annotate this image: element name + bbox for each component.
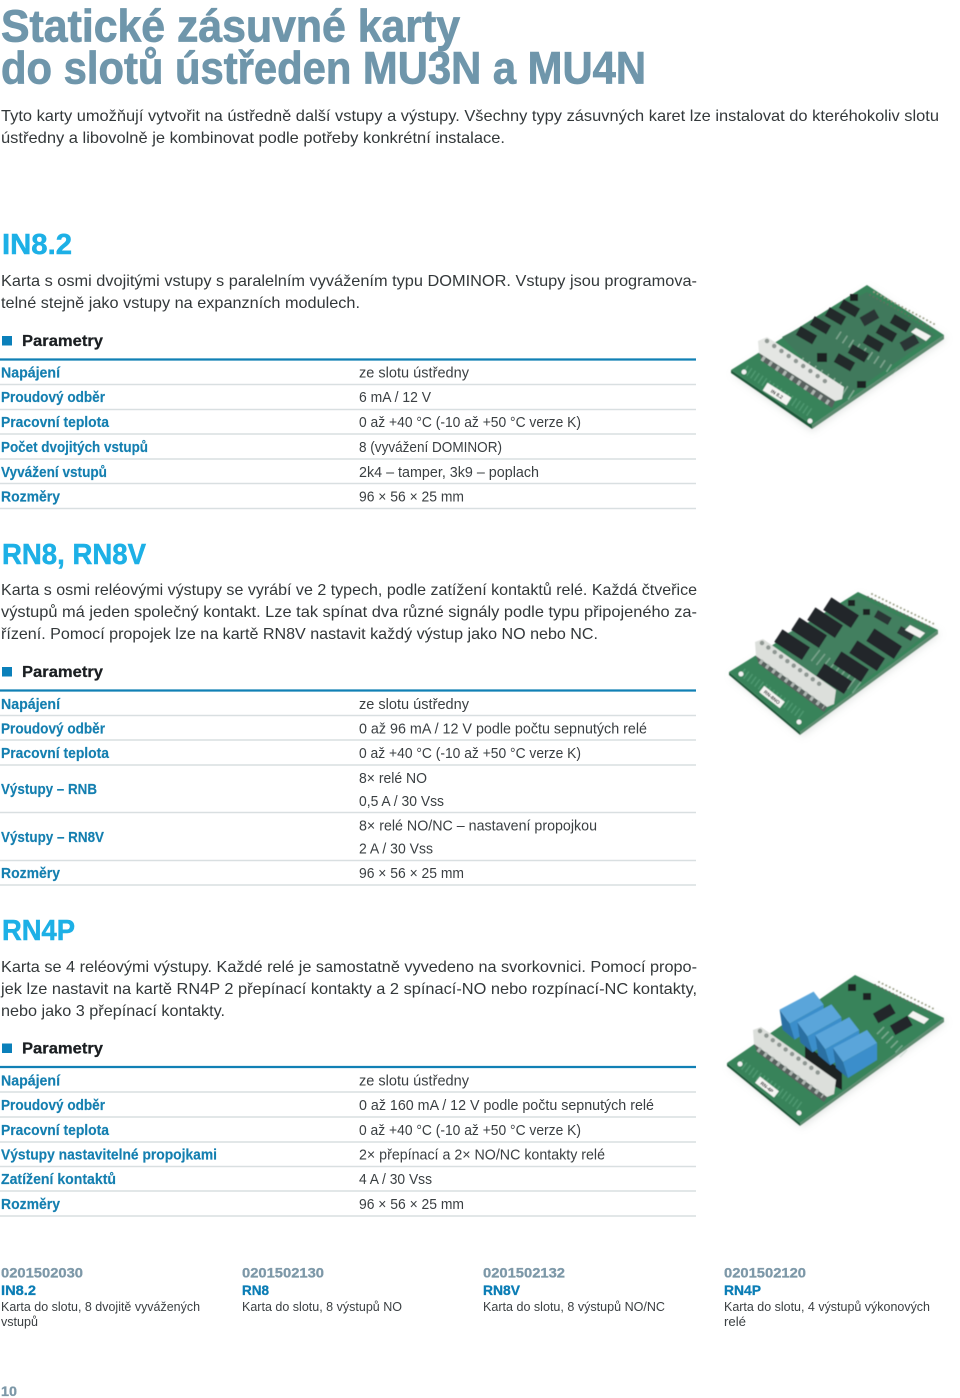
relay 2 <box>797 1004 841 1052</box>
table: IN8.2 parameters: ze slotu ústředny <box>359 366 470 382</box>
table: IN8.2 parameters: 2k4 – tamper, 3k9 – poplach <box>359 465 539 481</box>
product: RN8 <box>242 1266 402 1314</box>
product: RN8V <box>483 1266 665 1314</box>
table: RN4P parameters: Napájení <box>1 1074 61 1090</box>
table: RN8 parameters: ze slotu ústředny <box>359 697 470 713</box>
description: RN4P <box>0 959 697 1020</box>
label: IN 8.2: IN 8.2 <box>769 389 784 401</box>
product: RN8: RN8 <box>242 1283 269 1299</box>
table: RN8 parameters: Proudový odběr <box>1 722 105 738</box>
panel: RN8, RN8V <box>0 539 697 885</box>
product: RN4P: 0201502120 <box>724 1266 806 1282</box>
description: RN8, RN8V: řízení. Pomocí propojek lze na kartě RN8V nastavit každý výstup jako NO nebo NC. <box>1 626 598 643</box>
product: RN8V: Karta do slotu, 8 výstupů NO/NC <box>483 1299 665 1314</box>
table: RN4P parameters: 96 × 56 × 25 mm <box>359 1197 464 1213</box>
table: IN8.2 parameters: Vyvážení vstupů <box>1 465 107 481</box>
label: IN 8.2 <box>763 383 791 405</box>
product: IN8.2: Karta do slotu, 8 dvojitě vyvážených <box>1 1299 200 1314</box>
table: RN4P parameters: 0 až +40 °C (-10 až +50 °C verze K) <box>359 1123 581 1139</box>
panel: IN8.2 <box>0 229 697 508</box>
photo: IN8.2 circuit board <box>731 285 946 431</box>
product: IN8.2: vstupů <box>1 1314 38 1329</box>
description: RN4P: jek lze nastavit na kartě RN4P 2 přepínací kontakty a 2 spínací-NO nebo rozpínací-NC kontakty, <box>0 981 697 998</box>
subheading: Parametry: Parametry <box>22 1040 103 1058</box>
table: IN8.2 parameters: Proudový odběr <box>1 390 105 406</box>
table: IN8.2 parameters: 8 (vyvážení DOMINOR) <box>359 440 502 456</box>
table: IN8.2 parameters: 0 až +40 °C (-10 až +50 °C verze K) <box>359 415 581 431</box>
title <box>1 0 646 94</box>
description: RN4P: nebo jako 3 přepínací kontakty. <box>1 1003 225 1020</box>
photo: RN4P circuit board <box>727 975 946 1127</box>
subheading: Parametry: Parametry <box>22 333 103 350</box>
table: IN8.2 parameters <box>0 360 696 508</box>
intro text <box>1 108 939 147</box>
relay 1 <box>780 992 824 1040</box>
description: IN8.2 <box>1 273 697 312</box>
product: RN4P: Karta do slotu, 4 výstupů výkonových <box>724 1299 930 1314</box>
table: IN8.2 parameters: Počet dvojitých vstupů <box>1 440 148 456</box>
title: Statické zásuvné karty <box>1 0 460 52</box>
product: IN8.2: IN8.2 <box>1 1283 36 1299</box>
table: RN8 parameters: Napájení <box>1 697 61 713</box>
panel: RN4P <box>0 915 697 1216</box>
product: RN8V: RN8V <box>483 1283 521 1299</box>
table: RN4P parameters: Proudový odběr <box>1 1098 105 1114</box>
table: RN8 parameters: Výstupy – RN8V <box>1 830 104 846</box>
table: RN4P parameters: 2× přepínací a 2× NO/NC kontakty relé <box>359 1148 605 1164</box>
subheading: Parametry: Parametry <box>22 664 103 681</box>
table: RN8 parameters: 0 až 96 mA / 12 V podle počtu sepnutých relé <box>359 722 647 738</box>
product: IN8.2: 0201502030 <box>1 1266 83 1282</box>
table: RN8 parameters: 0 až +40 °C (-10 až +50 °C verze K) <box>359 746 581 762</box>
table: RN8 parameters: 8× relé NO <box>359 771 427 787</box>
table: RN8 parameters: 96 × 56 × 25 mm <box>359 866 464 882</box>
table: RN4P parameters: 0 až 160 mA / 12 V podle počtu sepnutých relé <box>359 1098 654 1114</box>
heading: RN4P: RN4P <box>2 915 75 947</box>
description: IN8.2: Karta s osmi dvojitými vstupy s paralelním vyvážením typu DOMINOR. Vstupy jsou programova- <box>1 273 697 290</box>
photo: RN8 circuit board <box>729 592 940 736</box>
description: IN8.2: telné stejně jako vstupy na expanzních modulech. <box>1 295 360 312</box>
table: RN4P parameters <box>0 1067 696 1216</box>
product: IN8.2 <box>1 1266 200 1329</box>
intro text: ústředny a libovolně je kombinovat podle potřeby konkrétní instalace. <box>1 130 505 147</box>
table: RN8 parameters: Výstupy – RNB <box>1 782 97 798</box>
table: RN4P parameters: ze slotu ústředny <box>359 1074 470 1090</box>
ordering codes <box>1 1266 930 1329</box>
table: RN8 parameters: Pracovní teplota <box>1 746 110 762</box>
label: RN-8NO: RN-8NO <box>762 690 781 706</box>
heading: IN8.2: IN8.2 <box>2 229 72 261</box>
description: RN8, RN8V <box>1 581 697 643</box>
product: RN8: Karta do slotu, 8 výstupů NO <box>242 1299 402 1314</box>
table: RN8 parameters: 2 A / 30 Vss <box>359 842 433 858</box>
label: RN-4P <box>755 1076 779 1098</box>
description: RN4P: Karta se 4 reléovými výstupy. Každé relé je samostatně vyvedeno na svorkovnici. Pomocí propo- <box>1 959 697 976</box>
table: RN4P parameters: Zatížení kontaktů <box>1 1172 116 1188</box>
intro text: Tyto karty umožňují vytvořit na ústředně další vstupy a výstupy. Všechny typy zásuvných karet lze instalovat do kteréhokoliv slotu <box>1 108 939 125</box>
table: IN8.2 parameters: 6 mA / 12 V <box>359 390 431 406</box>
table: IN8.2 parameters: Napájení <box>1 366 61 382</box>
product: RN4P: relé <box>724 1314 746 1329</box>
title: do slotů ústředen MU3N a MU4N <box>1 42 646 94</box>
label: RN-8NO <box>759 686 785 708</box>
table: RN4P parameters: 4 A / 30 Vss <box>359 1172 432 1188</box>
heading: RN8, RN8V: RN8, RN8V <box>2 539 147 571</box>
product: RN4P: RN4P <box>724 1283 761 1299</box>
description: RN8, RN8V: výstupů má jeden společný kontakt. Lze tak spínat dva různé signály podle typu připojeného za- <box>1 603 697 621</box>
table: IN8.2 parameters: Pracovní teplota <box>1 415 110 431</box>
product: RN4P <box>724 1266 930 1329</box>
table: IN8.2 parameters: Rozměry <box>1 490 61 506</box>
product: RN8V: 0201502132 <box>483 1266 565 1282</box>
table: RN8 parameters <box>0 690 696 885</box>
table: RN4P parameters: Výstupy nastavitelné propojkami <box>1 1148 217 1164</box>
description: RN8, RN8V: Karta s osmi reléovými výstupy se vyrábí ve 2 typech, podle zatížení kontaktů relé. Každá čtveřice <box>1 581 697 599</box>
table: IN8.2 parameters: 96 × 56 × 25 mm <box>359 490 464 506</box>
table: RN8 parameters: Rozměry <box>1 866 61 882</box>
relay 3 <box>815 1017 859 1065</box>
table: RN8 parameters: 8× relé NO/NC – nastavení propojkou <box>359 818 597 834</box>
product: RN8: 0201502130 <box>242 1266 324 1282</box>
label: RN-4P: RN-4P <box>759 1081 775 1095</box>
table: RN4P parameters: Rozměry <box>1 1197 61 1213</box>
relay 4 <box>833 1030 877 1078</box>
table: RN8 parameters: 0,5 A / 30 Vss <box>359 794 444 810</box>
table: RN4P parameters: Pracovní teplota <box>1 1123 110 1139</box>
